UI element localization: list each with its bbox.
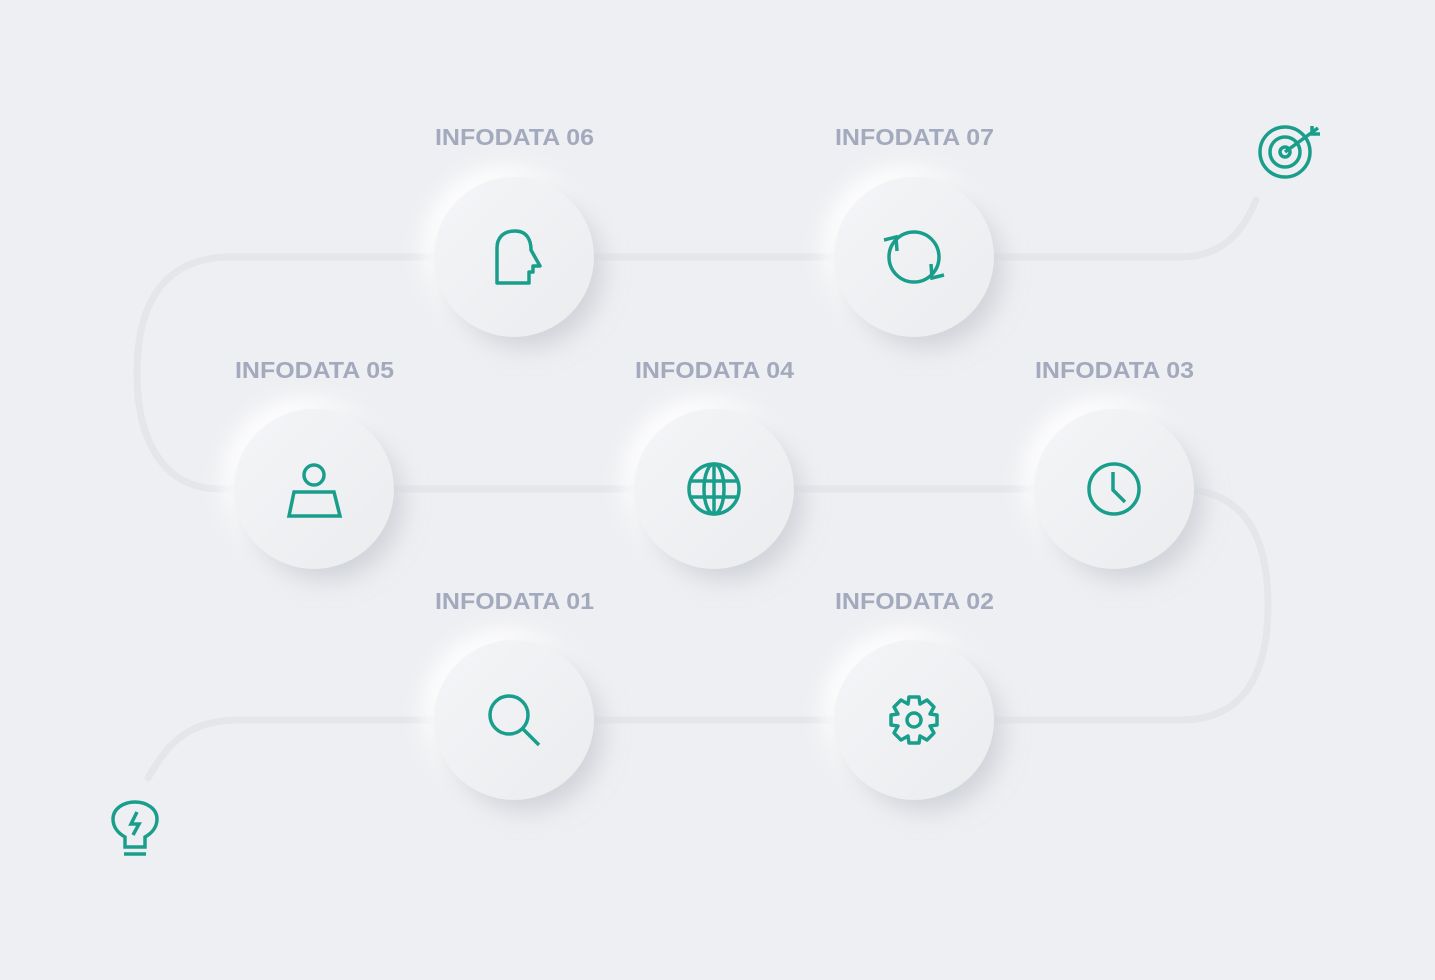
node 03 [1034,357,1194,569]
icon: person [289,465,340,516]
node 01: INFODATA 01 [435,588,594,614]
node 04: INFODATA 04 [635,357,794,383]
node 07: INFODATA 07 [835,124,994,150]
node 06 [434,124,594,337]
icon: globe [689,464,739,514]
icon: refresh [884,232,944,282]
node 02: INFODATA 02 [835,588,994,614]
node 02 [834,588,994,800]
node 01 [434,588,594,800]
node 03: INFODATA 03 [1035,357,1194,383]
icon: target [1260,126,1320,177]
path line [137,200,1268,778]
icon: head [497,231,540,283]
icon: clock [1089,464,1139,514]
node 05 [234,357,394,569]
node 06: INFODATA 06 [435,124,594,150]
icon: gear [891,697,937,743]
node 04 [634,357,794,569]
node 07 [834,124,994,337]
icon: bulb [113,802,157,854]
node 05: INFODATA 05 [235,357,394,383]
icon: search [490,696,539,745]
